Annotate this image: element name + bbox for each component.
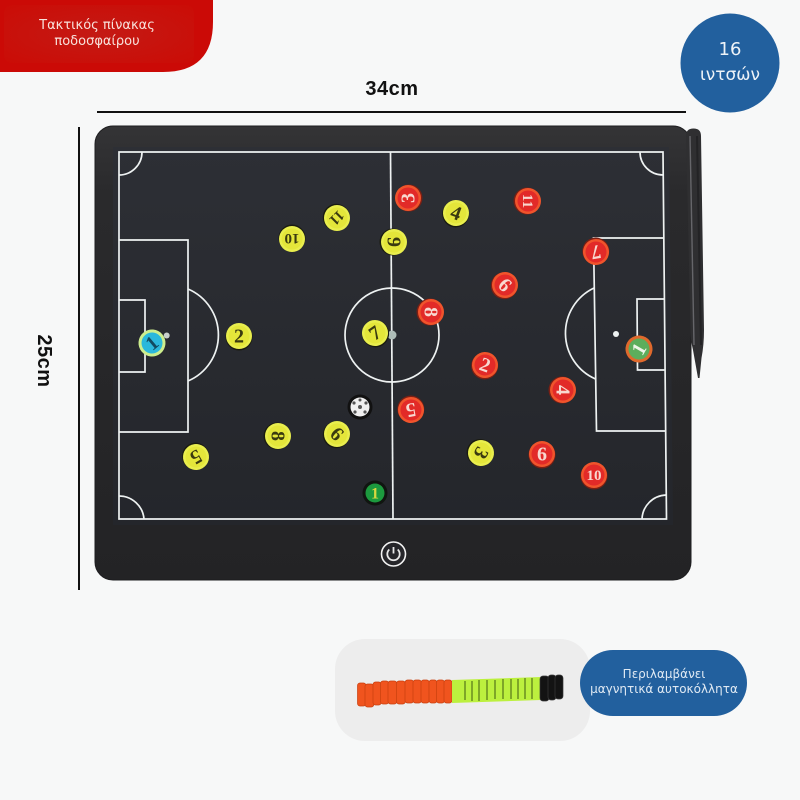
badge: product title: Τακτικός πίνακας: [38, 18, 155, 33]
token: red 5: 5: [404, 398, 418, 421]
token: blue goalkeeper 1: [133, 324, 171, 362]
token: red 11: [514, 188, 541, 214]
token: red 7: [580, 235, 612, 267]
magnet stack: orange: [358, 680, 452, 707]
token: red 3: [395, 184, 422, 212]
magnet stack: black: [540, 675, 563, 701]
token: red 4: [548, 376, 576, 404]
token: red 5: [395, 393, 427, 425]
width dimension: 34cm: 34cm: [365, 78, 419, 100]
token: yellow 9: 9: [382, 237, 404, 247]
token: red 2: 2: [476, 353, 493, 378]
token: referee green: [362, 480, 388, 506]
stylus pen: [686, 128, 704, 378]
token: yellow 3: [462, 434, 499, 471]
token: green goalkeeper 1: [621, 331, 657, 367]
height dimension: 25cm: 25cm: [33, 334, 55, 388]
token: blue goalkeeper 1: 1: [141, 332, 163, 355]
token: red 6: 6: [493, 274, 516, 297]
token: yellow 5: 5: [186, 445, 206, 469]
token: yellow 2: 2: [234, 326, 244, 348]
token: yellow 6: [317, 415, 356, 454]
token: yellow 2: [226, 323, 252, 350]
token: yellow 4: 4: [447, 201, 464, 226]
magnet stack: green: [452, 677, 541, 703]
token: red 7: 7: [589, 240, 603, 263]
token: yellow 5: [177, 438, 214, 475]
token: football: [348, 394, 372, 420]
token: yellow 10: [278, 224, 306, 252]
token: yellow 7: [356, 315, 394, 353]
panel: magnets photo: [335, 639, 590, 741]
token: red 2: [467, 348, 502, 383]
badge: 16 inches: [680, 14, 780, 112]
badge: 16 inches: 16: [719, 39, 741, 60]
token: red 10: [580, 462, 608, 490]
power button: [382, 542, 406, 566]
token: yellow 8: 8: [266, 431, 288, 441]
token: red 11: 11: [519, 194, 535, 208]
token: red 10: 10: [586, 468, 602, 484]
token: yellow 8: [264, 422, 291, 450]
callout: includes magnetic stickers: [580, 650, 747, 716]
badge: 16 inches: ιντσών: [700, 65, 760, 85]
token: yellow 10: 10: [284, 230, 300, 246]
token: red 3: 3: [398, 193, 420, 203]
callout: includes magnetic stickers: Περιλαμβάνει: [623, 667, 705, 681]
token: red 4: 4: [552, 385, 574, 395]
token: red 6 lower: [528, 441, 556, 468]
token: red 8: [416, 298, 444, 326]
screen: [113, 147, 673, 525]
token: yellow 9: [380, 228, 407, 256]
token: red 6 lower: 6: [537, 444, 547, 466]
token: red 6: [485, 266, 524, 305]
tablet board: [95, 126, 691, 580]
token: yellow 3: 3: [469, 443, 493, 463]
token: yellow 6: 6: [325, 423, 348, 446]
token: yellow 7: 7: [365, 322, 386, 345]
token: yellow 4: [438, 196, 473, 231]
callout: includes magnetic stickers: μαγνητικά αυτοκόλλητα: [590, 682, 738, 696]
token: red 8: 8: [420, 307, 442, 317]
football pitch lines: [119, 152, 666, 519]
badge: product title: ποδοσφαίρου: [54, 34, 140, 49]
token: yellow 11: 11: [326, 207, 347, 228]
token: green goalkeeper 1: 1: [627, 339, 651, 359]
badge: product title: [0, 0, 213, 72]
token: referee green: 1: [371, 486, 379, 502]
token: yellow 11: [317, 198, 356, 237]
